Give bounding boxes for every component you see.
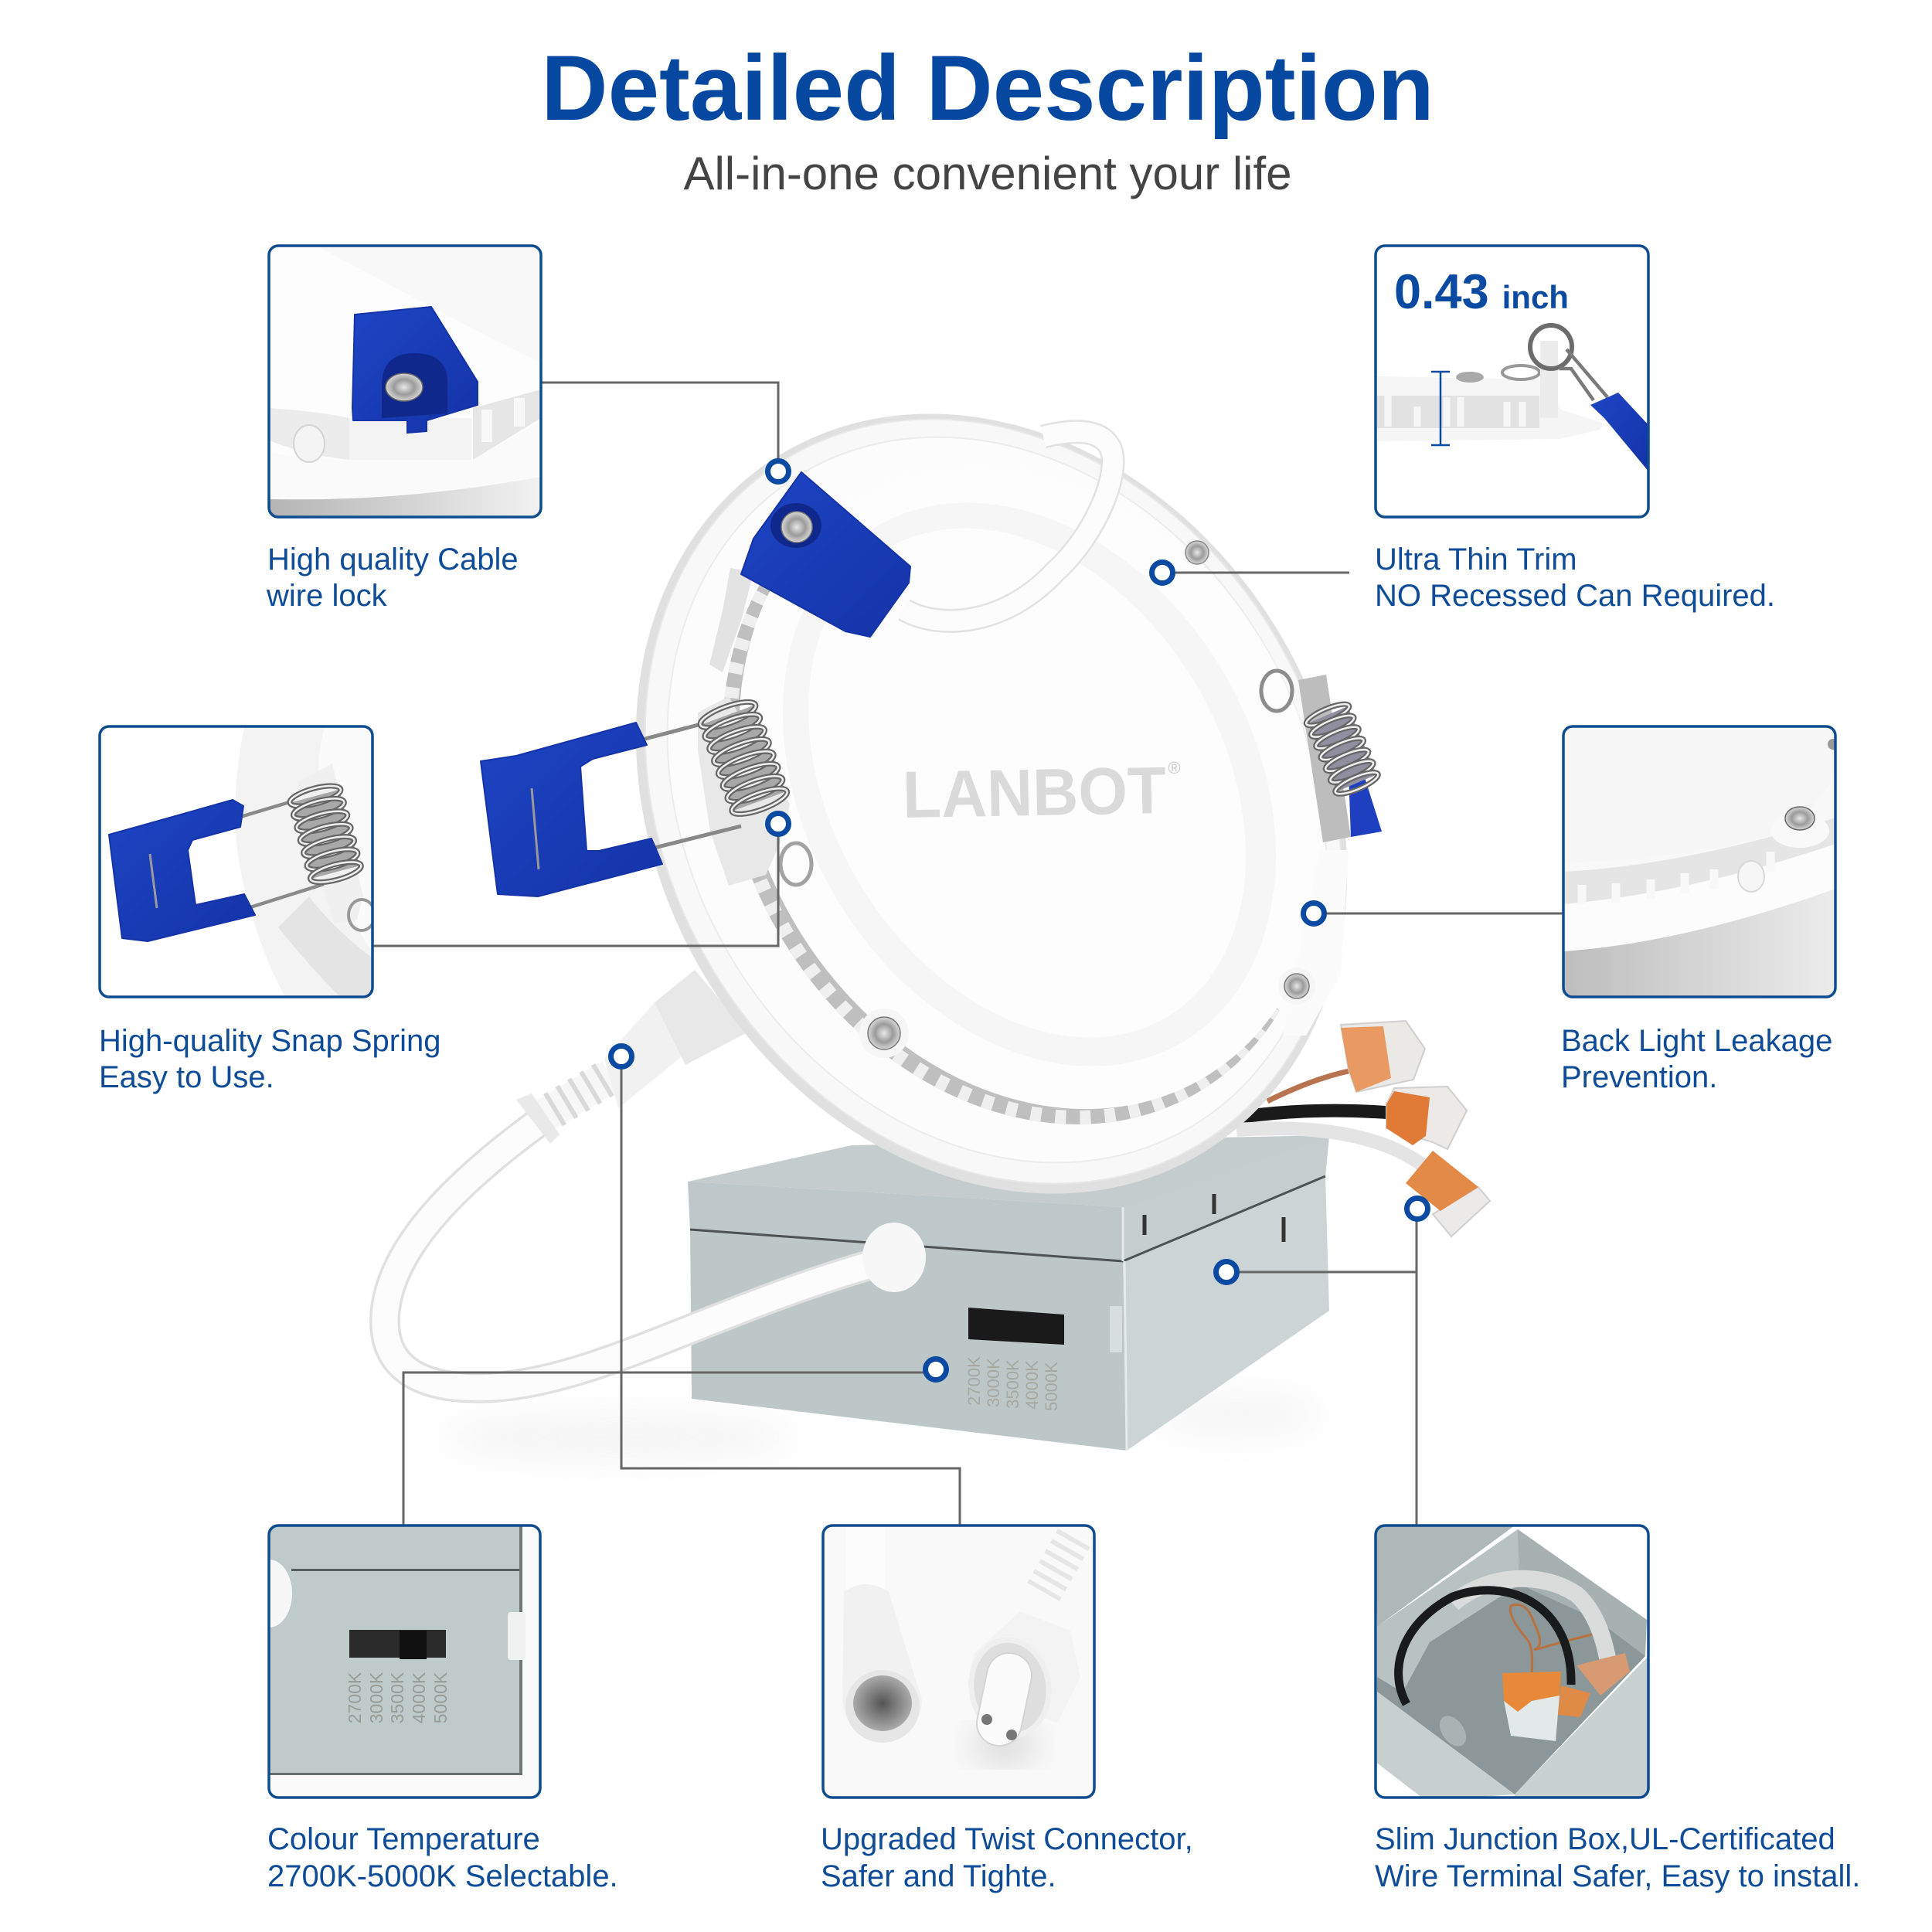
cable lock bracket: [709, 568, 753, 672]
dimension mark: [1431, 372, 1450, 445]
floor shadow: [440, 1391, 1321, 1461]
caption: junction box: Wire Terminal Safer, Easy to install.: [1375, 1859, 1860, 1893]
right pin: [999, 1675, 1009, 1723]
box face: [269, 1526, 522, 1774]
wall left: [269, 408, 349, 460]
shadow: [974, 1730, 1036, 1760]
left clip blue: [481, 723, 662, 896]
box seams: [690, 1176, 1325, 1261]
box right face: [1123, 1176, 1329, 1451]
frame: [1563, 726, 1835, 997]
caption: ultra thin: Ultra Thin Trim: [1375, 543, 1577, 577]
trim side view: [1377, 376, 1604, 441]
screw lobe: [1770, 814, 1829, 848]
frame: [823, 1526, 1094, 1798]
right sleeve: [968, 1611, 1080, 1723]
inner floor: [1377, 1529, 1645, 1794]
heat sink teeth: [725, 585, 1280, 1124]
thickness label: 0.43 inch: [1394, 265, 1569, 319]
leader line: snap spring: [372, 824, 778, 946]
slider thumb: [400, 1631, 427, 1659]
white cable: [1453, 1579, 1607, 1658]
side tab: [508, 1612, 526, 1660]
background: [1563, 726, 1835, 997]
registered mark: ®: [1168, 758, 1181, 777]
background: [1376, 1526, 1648, 1798]
colour temperature labels: 2700K: [964, 1356, 984, 1406]
colour temperature labels: 3500K: [1003, 1359, 1022, 1409]
spring rods: [1560, 349, 1607, 400]
colour temperature labels: 3000K: [984, 1358, 1003, 1407]
upper right wall: [1518, 1529, 1647, 1656]
right spring bracket: [1298, 675, 1351, 842]
keyhole slot: [1434, 1711, 1471, 1751]
screw: [1785, 807, 1815, 830]
box lid front: [688, 1182, 1123, 1261]
lock pedestal: [349, 418, 471, 460]
floor band: [269, 477, 541, 517]
frame: [100, 726, 372, 997]
copper loop: [1510, 1604, 1592, 1675]
temperature labels: 4000K: [409, 1672, 429, 1723]
temperature labels: 3500K: [387, 1672, 407, 1723]
strain relief ribs: [536, 1076, 611, 1121]
background: [269, 1526, 540, 1798]
panel: snap spring: [100, 726, 375, 997]
box top face: [688, 1135, 1329, 1261]
title: Detailed Description: [541, 37, 1434, 140]
slider slot: [349, 1630, 446, 1658]
second connector: [1558, 1685, 1590, 1717]
right spring ring: [1261, 671, 1292, 711]
copper wire: [1267, 1070, 1352, 1101]
caption: cable lock: High quality Cable: [267, 543, 519, 577]
box slots: [1145, 1194, 1284, 1242]
colour temperature labels: 5000K: [1042, 1362, 1061, 1411]
wall ribs: [487, 398, 519, 442]
teeth shadow: [278, 896, 372, 997]
screw right: [1278, 968, 1315, 1005]
lamp edge: [235, 727, 372, 997]
leader line: twist connector: [621, 1056, 960, 1526]
inner body: [318, 727, 372, 951]
panel: back light leakage: [1563, 726, 1838, 997]
right ribs: [1043, 1538, 1074, 1592]
caption: snap spring: High-quality Snap Spring: [99, 1024, 440, 1058]
caption: colour temperature: Colour Temperature: [267, 1822, 540, 1856]
pin hole 1: [981, 1714, 992, 1725]
leader line: back light: [1314, 912, 1563, 915]
low voltage cable: [385, 1121, 926, 1388]
caption: cable lock: wire lock: [266, 579, 388, 613]
trim ribs: [1388, 396, 1522, 427]
first connector: [1502, 1672, 1561, 1712]
connector flange: [516, 1094, 560, 1144]
left wires: [642, 723, 741, 848]
small screw: [1456, 372, 1484, 383]
caption: junction box: Slim Junction Box,UL-Certificated: [1375, 1822, 1835, 1856]
wires: [240, 801, 324, 907]
ridge wall: [1563, 818, 1835, 904]
panel: ultra thin trim: [1376, 246, 1649, 517]
flange background: [269, 246, 541, 517]
lock screw: [386, 373, 423, 401]
black wire: [1236, 1111, 1391, 1117]
white wire: [1236, 1128, 1434, 1175]
background: [100, 726, 372, 997]
body top: [1563, 726, 1835, 863]
spring ring: [1530, 325, 1572, 369]
lobe right: [1283, 850, 1349, 1036]
lock screw: [770, 503, 821, 548]
temperature labels: 2700K: [345, 1672, 365, 1723]
peg: [1738, 861, 1764, 892]
wire connector bottom: [1406, 1151, 1490, 1236]
lid: [1376, 1526, 1515, 1627]
left cable: [846, 1526, 885, 1626]
marker dots: [611, 461, 1428, 1380]
connector sleeve: [655, 970, 747, 1065]
panel: colour temperature: [246, 1526, 540, 1798]
trim wall: [1377, 396, 1539, 428]
screw bottom left: [859, 1009, 909, 1058]
junction box: [688, 1135, 1329, 1451]
frame: [1376, 246, 1648, 517]
raised ring: [683, 412, 1376, 1157]
panel: cable wire lock: [269, 246, 541, 517]
third connector: [1577, 1653, 1630, 1696]
blue clip: [109, 800, 255, 941]
cable grommet: [862, 1223, 926, 1292]
lower left outside: [1376, 1692, 1515, 1798]
frame: [269, 1526, 540, 1798]
flange: [1563, 842, 1835, 951]
caption: back light: Back Light Leakage: [1561, 1024, 1832, 1058]
right coil: [1304, 700, 1380, 798]
panel: twist connector: [823, 1526, 1094, 1798]
ridges: [1582, 852, 1770, 904]
caption: snap spring: Easy to Use.: [99, 1060, 274, 1094]
background: [1376, 246, 1648, 517]
screw top right: [1185, 541, 1209, 564]
lock recess: [382, 353, 447, 418]
leader line: ultra thin trim: [1162, 572, 1349, 573]
panel: junction box: [1376, 1526, 1648, 1798]
post: [1540, 341, 1558, 418]
left spring bracket: [698, 696, 790, 886]
trim top edge: [1377, 376, 1540, 396]
frame: [269, 246, 541, 517]
coil: [288, 782, 363, 886]
background: [823, 1526, 1094, 1798]
caption: twist connector: Safer and Tighte.: [821, 1859, 1056, 1893]
leader line: cable lock: [541, 383, 778, 471]
left body: [842, 1584, 922, 1739]
right ring: [965, 1635, 1055, 1740]
outer rim: [495, 281, 1488, 1326]
bracket: [298, 764, 363, 923]
wall right: [473, 389, 541, 460]
flange lower: [269, 421, 541, 499]
frame: [1376, 1526, 1648, 1798]
temperature labels: [345, 1672, 451, 1723]
inner disc: [719, 448, 1335, 1117]
cable loop: [904, 432, 1113, 621]
left socket: [853, 1675, 912, 1731]
box lid right: [1123, 1135, 1329, 1261]
blue clip: [1590, 393, 1649, 472]
box front face: [690, 1230, 1127, 1451]
blue lock: [352, 307, 478, 433]
caption: ultra thin: NO Recessed Can Required.: [1375, 579, 1775, 613]
small ring: [1502, 366, 1539, 379]
floor shadow: [1563, 889, 1835, 997]
seam: [291, 1569, 519, 1571]
pin hole 2: [1006, 1730, 1017, 1740]
leader line: junction box: [1226, 1209, 1417, 1526]
clear housing: [1504, 1696, 1560, 1741]
temperature labels: 5000K: [430, 1672, 451, 1723]
left face: [845, 1670, 920, 1743]
caption: back light: Prevention.: [1561, 1060, 1717, 1094]
left spring ring: [781, 843, 811, 885]
temperature labels: 3000K: [366, 1672, 386, 1723]
lower right outside: [1515, 1656, 1648, 1798]
body curve: [317, 246, 541, 363]
wire connector top: [1341, 1021, 1425, 1092]
grommet: [246, 1560, 292, 1628]
wire connector middle: [1386, 1087, 1467, 1149]
pin: [150, 854, 157, 908]
caption: colour temperature: 2700K-5000K Selectable.: [267, 1859, 618, 1893]
clip pin: [532, 788, 539, 869]
logo: LANBOT: [902, 753, 1167, 832]
small screw: [1828, 739, 1838, 750]
flange step: [536, 315, 1458, 1285]
trim flange: [507, 290, 1479, 1313]
right clip blue: [1349, 773, 1382, 837]
caption: twist connector: Upgraded Twist Connector,: [821, 1822, 1193, 1856]
leader line: colour temperature: [403, 1372, 936, 1526]
body: [623, 356, 1439, 1217]
black cable: [1399, 1590, 1571, 1704]
upper left wall: [1377, 1529, 1519, 1692]
cable lock blue: [741, 472, 910, 637]
connector stem: [604, 1002, 692, 1108]
right edge: [519, 1526, 522, 1774]
colour temperature labels: 4000K: [1022, 1360, 1042, 1410]
box side tab: [1110, 1306, 1122, 1352]
peg: [294, 425, 325, 462]
colour temperature labels: [964, 1356, 1061, 1411]
left coil: [698, 697, 790, 819]
spring ring: [349, 900, 375, 930]
twist connector: [516, 970, 747, 1144]
slide switch: [968, 1308, 1064, 1345]
subtitle: All-in-one convenient your life: [683, 148, 1292, 199]
LED panel light: [480, 414, 1382, 1193]
bottom edge: [269, 1773, 522, 1775]
